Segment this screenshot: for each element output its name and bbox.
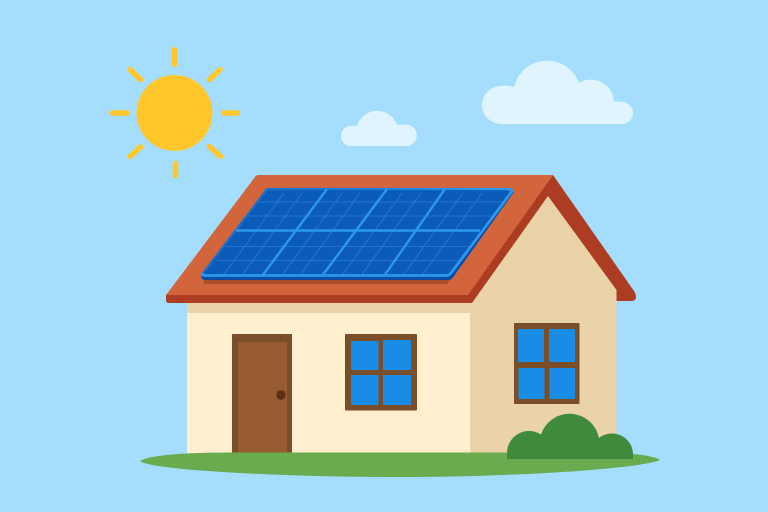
panel base edge	[201, 190, 514, 280]
roof front face	[166, 175, 553, 295]
house wall: gable side	[470, 186, 616, 454]
roof gable edge	[460, 175, 636, 303]
front window	[345, 334, 417, 410]
side window	[514, 323, 580, 404]
small cloud	[341, 111, 417, 146]
panel frame: right and bottom	[202, 190, 512, 276]
door	[232, 334, 292, 454]
thin cell lines	[216, 193, 502, 274]
solar panel array	[201, 188, 514, 284]
ground	[140, 452, 660, 477]
icon: sun	[112, 50, 238, 176]
house wall: front	[187, 303, 471, 454]
large cloud	[482, 61, 633, 124]
roof	[166, 175, 636, 303]
panel dividers	[236, 189, 480, 276]
panel shadow	[203, 278, 452, 284]
panel frame: top and left	[202, 189, 510, 274]
door knob	[276, 390, 286, 400]
roof front eave	[166, 295, 472, 303]
bush	[507, 414, 633, 459]
panel surface	[201, 188, 512, 276]
